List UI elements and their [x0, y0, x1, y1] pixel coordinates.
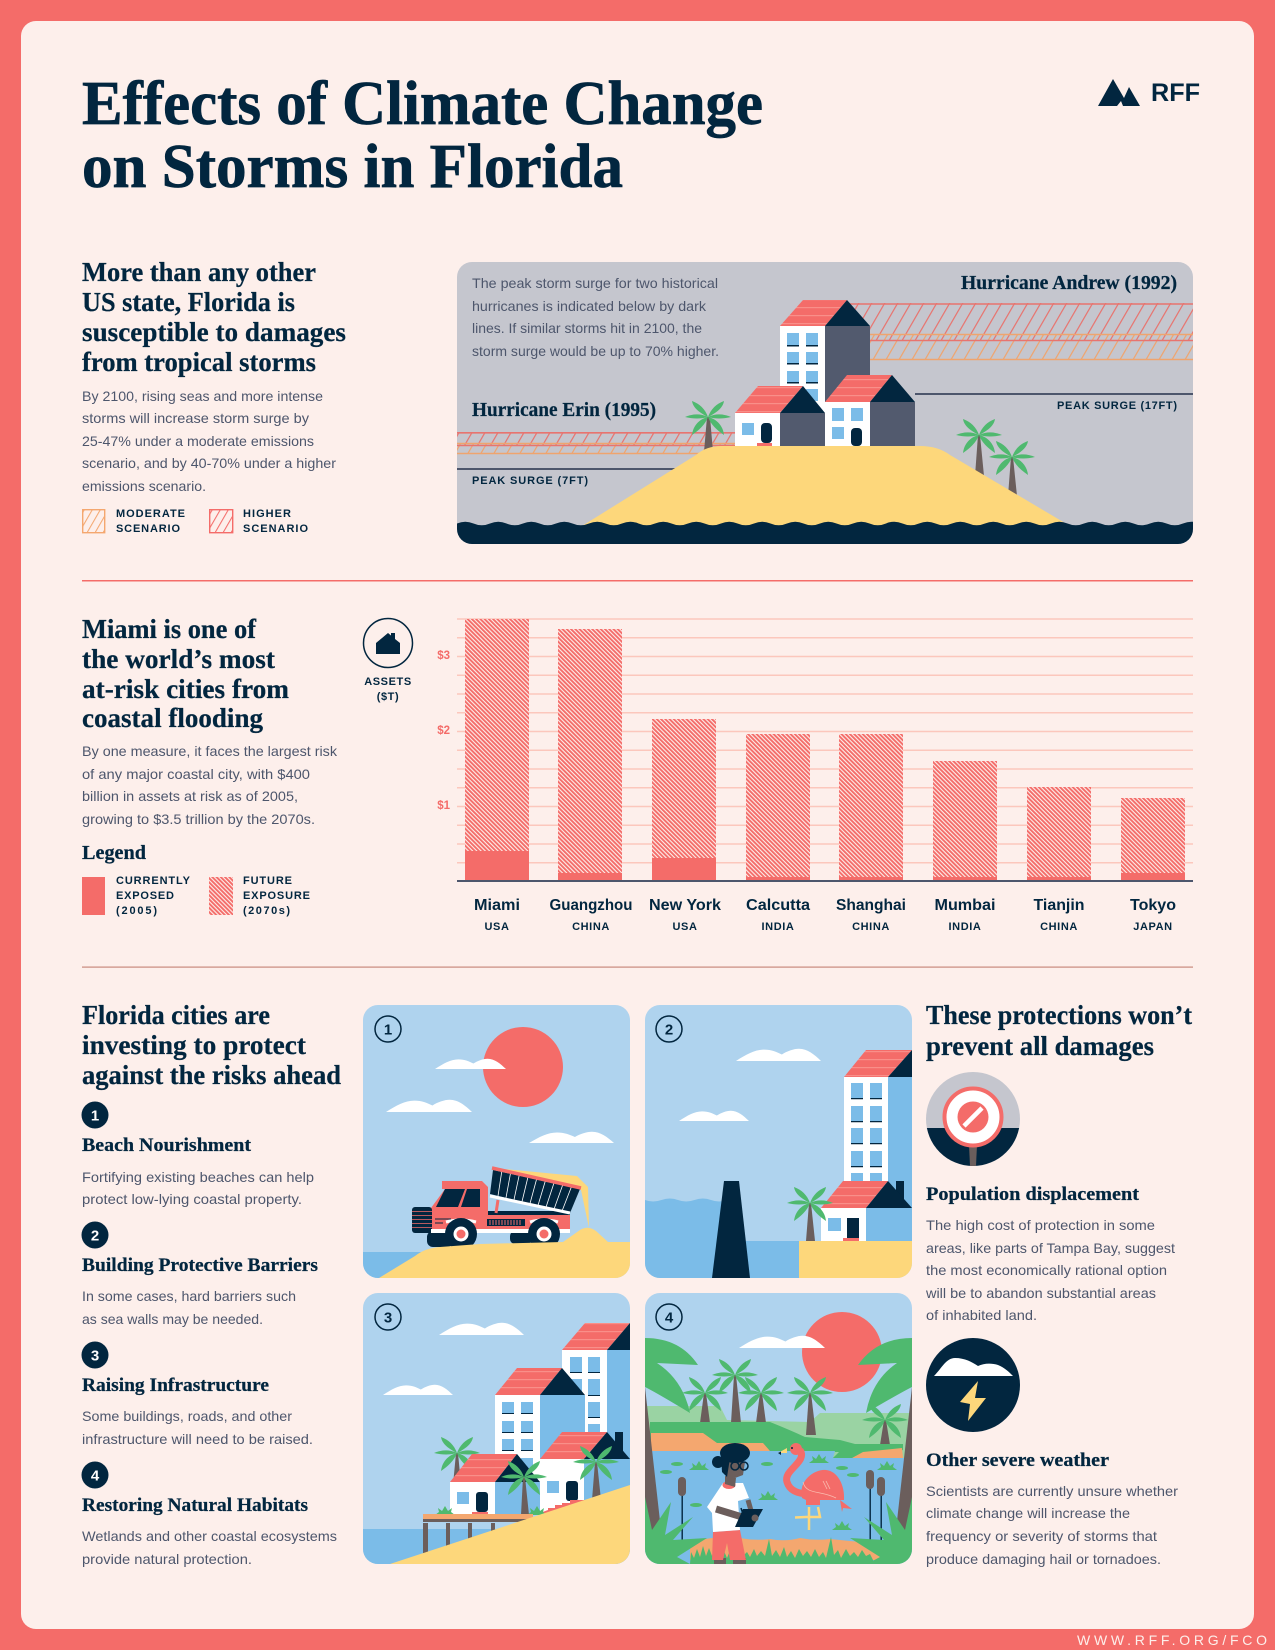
orange banks	[651, 1433, 903, 1458]
item: population displacement: Population displacement	[926, 1184, 1140, 1205]
item 1: beach nourishment: Fortifying existing beaches can help	[82, 1169, 314, 1185]
icon: assets house	[364, 618, 412, 703]
badge 3: 3	[384, 1310, 392, 1326]
heading: Miami	[82, 614, 289, 733]
city labels	[474, 897, 1176, 914]
item: population displacement: will be to abandon substantial areas	[925, 1285, 1156, 1301]
city labels: Tokyo	[1130, 897, 1176, 914]
dark green land	[650, 1422, 903, 1458]
city labels: Shanghai	[836, 897, 906, 914]
badge 1: 1	[384, 1022, 392, 1038]
badge 2: 2	[665, 1022, 673, 1038]
section 2 text block	[82, 614, 338, 917]
pier	[423, 1514, 533, 1553]
icon: no sign	[926, 1072, 1020, 1166]
body text: Miami: By one measure, it faces the largest risk	[82, 743, 338, 759]
heading: investing: Florida cities are	[82, 1000, 270, 1030]
body text: Miami: growing to $3.5 trillion by the 2070s.	[82, 811, 315, 827]
body text: Miami: of any major coastal city, with $400	[82, 766, 310, 782]
bar: Guangzhou	[558, 629, 622, 881]
country labels: CHINA	[572, 921, 610, 933]
item 4: natural habitats: Restoring Natural Habitats	[82, 1495, 308, 1516]
bar: Calcutta	[746, 734, 810, 881]
heading: investing: investing to protect	[82, 1030, 306, 1060]
item: other severe weather: Other severe weather	[926, 1450, 1110, 1471]
item: population displacement: of inhabited land.	[926, 1307, 1037, 1323]
cloud	[739, 1336, 825, 1348]
legend: future exposure: EXPOSURE	[243, 890, 310, 902]
country labels: CHINA	[1040, 921, 1078, 933]
item 4: natural habitats	[82, 1462, 337, 1567]
tall building	[780, 300, 870, 416]
Andrew peak line	[915, 393, 1193, 395]
legend: currently exposed: CURRENTLY	[116, 875, 191, 887]
right house	[540, 1432, 630, 1513]
item 1: beach nourishment: Beach Nourishment	[82, 1135, 252, 1156]
sun	[483, 1027, 563, 1107]
item 4: natural habitats: provide natural protection.	[82, 1551, 252, 1567]
bar: Shanghai	[839, 734, 903, 881]
panel: illustration 1 beach nourishment	[363, 1005, 630, 1278]
bar: New York	[652, 719, 716, 881]
legend: higher scenario: HIGHER	[243, 508, 291, 520]
palm right lower	[989, 441, 1035, 496]
item 1: beach nourishment	[82, 1102, 314, 1207]
body text: storm surge: emissions scenario.	[82, 478, 206, 494]
palms	[682, 1359, 908, 1445]
legend: higher scenario: SCENARIO	[243, 523, 308, 535]
label: Hurricane Erin: Hurricane Erin (1995)	[472, 399, 656, 421]
city labels: New York	[649, 897, 721, 914]
label: peak surge 7ft: PEAK SURGE (7FT)	[472, 475, 588, 487]
heading: susceptibility: from tropical storms	[82, 347, 316, 377]
badge 4: 4	[665, 1310, 674, 1326]
heading: susceptibility: US state, Florida is	[82, 287, 295, 317]
body text: storm surge	[82, 388, 336, 494]
item: population displacement: The high cost of protection in some	[926, 1217, 1155, 1233]
sun	[802, 1312, 882, 1392]
y axis labels: $2	[437, 725, 450, 737]
item: population displacement: areas, like parts of Tampa Bay, suggest	[926, 1240, 1175, 1256]
heading: Miami: the world’s most	[82, 644, 275, 674]
item: other severe weather: Scientists are currently unsure whether	[926, 1483, 1178, 1499]
palm right upper	[956, 419, 1002, 476]
country labels: CHINA	[852, 921, 890, 933]
heading: Miami: coastal flooding	[82, 703, 263, 733]
badge 2	[656, 1016, 682, 1042]
heading: investing: against the risks ahead	[82, 1060, 341, 1090]
distant hills	[645, 1406, 912, 1460]
y axis labels: $3	[437, 650, 450, 662]
legend: moderate scenario	[83, 508, 185, 535]
body text: Miami	[82, 743, 338, 827]
legend: moderate scenario: SCENARIO	[116, 523, 180, 535]
item 3: raising infrastructure: 3	[91, 1348, 99, 1364]
legend: higher scenario	[210, 508, 308, 535]
item 2: protective barriers: In some cases, hard barriers such	[82, 1288, 296, 1304]
item 2: protective barriers: Building Protective Barriers	[82, 1255, 318, 1276]
country labels: JAPAN	[1133, 921, 1173, 933]
item 2: protective barriers: as sea walls may be needed.	[82, 1311, 263, 1327]
country labels: INDIA	[762, 921, 794, 933]
heading: investing	[82, 1000, 341, 1090]
surge description text: The peak storm surge for two historical	[472, 275, 718, 291]
item 3: raising infrastructure: Raising Infrastructure	[82, 1375, 269, 1396]
item 1: beach nourishment: protect low-lying coastal property.	[82, 1191, 302, 1207]
section 3 text block	[82, 1000, 341, 1567]
palm back	[434, 1437, 480, 1478]
panel: illustration 3 raised infrastructure	[363, 1293, 630, 1564]
house	[821, 1181, 912, 1241]
title: Effects of Climate Change	[82, 70, 763, 138]
sand	[379, 1228, 630, 1278]
item 3: raising infrastructure	[82, 1342, 313, 1447]
legend: currently exposed	[82, 875, 191, 917]
country labels: USA	[672, 921, 698, 933]
country labels: INDIA	[949, 921, 981, 933]
icon: storm cloud	[926, 1338, 1020, 1432]
item: population displacement	[925, 1184, 1175, 1323]
bar: Miami	[465, 619, 529, 881]
icon: assets house: ($T)	[377, 691, 399, 703]
item: population displacement: the most economically rational option	[926, 1262, 1167, 1278]
city labels: Guangzhou	[550, 897, 632, 914]
Andrew surge hatch bands	[845, 303, 1193, 360]
legend: currently exposed: EXPOSED	[116, 890, 174, 902]
heading: protections: prevent all damages	[926, 1031, 1154, 1061]
badge 4	[656, 1304, 682, 1330]
item: other severe weather: climate change will increase the	[926, 1505, 1130, 1521]
bar: Tianjin	[1027, 787, 1091, 881]
panel: illustration 2 barriers	[645, 1005, 912, 1278]
flamingo	[778, 1443, 852, 1530]
country labels	[484, 921, 1173, 933]
city labels: Miami	[474, 897, 520, 914]
y axis labels	[437, 650, 451, 812]
item 2: protective barriers: 2	[91, 1228, 99, 1244]
cattails	[678, 1470, 885, 1544]
country labels: USA	[484, 921, 510, 933]
badge 3	[375, 1304, 401, 1330]
clouds	[386, 1059, 614, 1143]
island	[582, 446, 1070, 526]
item 4: natural habitats: Wetlands and other coastal ecosystems	[82, 1528, 337, 1544]
item 2: protective barriers	[82, 1222, 318, 1327]
badge 1	[375, 1016, 401, 1042]
heading: Miami: at-risk cities from	[82, 674, 289, 704]
body text: storm surge: 25-47% under a moderate emissions	[82, 433, 314, 449]
title	[82, 70, 763, 201]
legend: future exposure	[209, 875, 310, 917]
shore and grass	[645, 1497, 912, 1564]
heading: susceptibility: More than any other	[82, 257, 316, 287]
body text: storm surge: storms will increase storm surge by	[82, 410, 309, 426]
city labels: Calcutta	[746, 897, 810, 914]
title: on Storms in Florida	[82, 133, 623, 201]
sand	[799, 1241, 912, 1278]
item: other severe weather	[926, 1450, 1178, 1567]
heading: susceptibility: susceptible to damages	[82, 317, 346, 347]
item 3: raising infrastructure: Some buildings, roads, and other	[82, 1408, 292, 1424]
legend: future exposure: FUTURE	[243, 875, 292, 887]
right column	[925, 1000, 1192, 1567]
footer url: WWW.RFF.ORG/FCO	[1077, 1632, 1267, 1648]
legend heading: Legend	[82, 842, 146, 864]
heading: protections: These protections won’t	[926, 1000, 1192, 1030]
heading: susceptibility	[82, 257, 346, 377]
bar: Tokyo	[1121, 798, 1185, 881]
body text: storm surge: scenario, and by 40-70% under a higher	[82, 455, 336, 471]
tower	[844, 1050, 912, 1208]
icon: assets house: ASSETS	[364, 676, 412, 688]
heading: protections	[926, 1000, 1192, 1061]
water	[645, 1451, 912, 1564]
city labels: Tianjin	[1034, 897, 1084, 914]
item 1: beach nourishment: 1	[91, 1108, 99, 1124]
front house	[450, 1454, 540, 1515]
Erin surge hatch bands	[457, 432, 737, 454]
small house left	[735, 386, 825, 446]
panel: storm surge illustration	[457, 262, 1200, 544]
waves	[457, 522, 1200, 544]
Erin peak line	[457, 468, 675, 470]
small house right	[825, 375, 915, 446]
section 1 text block	[82, 257, 346, 535]
clouds	[679, 1049, 821, 1121]
surge description text: lines. If similar storms hit in 2100, the	[472, 320, 702, 336]
palm left	[685, 401, 731, 452]
city labels: Mumbai	[934, 897, 996, 914]
label: peak surge 17ft: PEAK SURGE (17FT)	[1057, 400, 1177, 412]
legend: future exposure: (2070s)	[243, 905, 290, 917]
body text: storm surge: By 2100, rising seas and more intense	[82, 388, 323, 404]
y axis labels: $1	[437, 800, 451, 812]
item 4: natural habitats: 4	[91, 1468, 100, 1484]
RFF logo	[1098, 79, 1200, 107]
middle building	[495, 1368, 585, 1485]
item: other severe weather: produce damaging hail or tornadoes.	[926, 1551, 1161, 1567]
person	[707, 1443, 763, 1564]
surge description text	[472, 275, 719, 359]
RFF logo: RFF	[1151, 79, 1200, 107]
sand stream	[505, 1169, 589, 1228]
clouds	[383, 1323, 524, 1395]
item 3: raising infrastructure: infrastructure will need to be raised.	[82, 1431, 313, 1447]
surge description text: hurricanes is indicated below by dark	[472, 298, 707, 314]
bar: Mumbai	[933, 761, 997, 881]
bar chart: assets at risk	[437, 619, 1193, 933]
back building	[562, 1323, 630, 1459]
legend: currently exposed: (2005)	[116, 905, 157, 917]
dump truck	[412, 1168, 589, 1250]
big palm fronds	[645, 1338, 912, 1413]
palms front	[435, 1446, 619, 1515]
panel: illustration 4 habitats	[645, 1293, 912, 1564]
sea wall	[712, 1181, 750, 1278]
palm	[787, 1187, 833, 1241]
surge description text: storm surge would be up to 70% higher.	[472, 343, 719, 359]
sea	[645, 1198, 800, 1278]
hillside	[390, 1485, 630, 1564]
item: other severe weather: frequency or severity of storms that	[926, 1528, 1157, 1544]
legend: moderate scenario: MODERATE	[116, 508, 185, 520]
heading: Miami: Miami is one of	[82, 614, 257, 644]
label: Hurricane Andrew: Hurricane Andrew (1992)	[961, 272, 1177, 294]
lily pads and tufts	[660, 1454, 897, 1530]
body text: Miami: billion in assets at risk as of 2005,	[82, 788, 298, 804]
foreground tree trunks	[645, 1387, 912, 1545]
